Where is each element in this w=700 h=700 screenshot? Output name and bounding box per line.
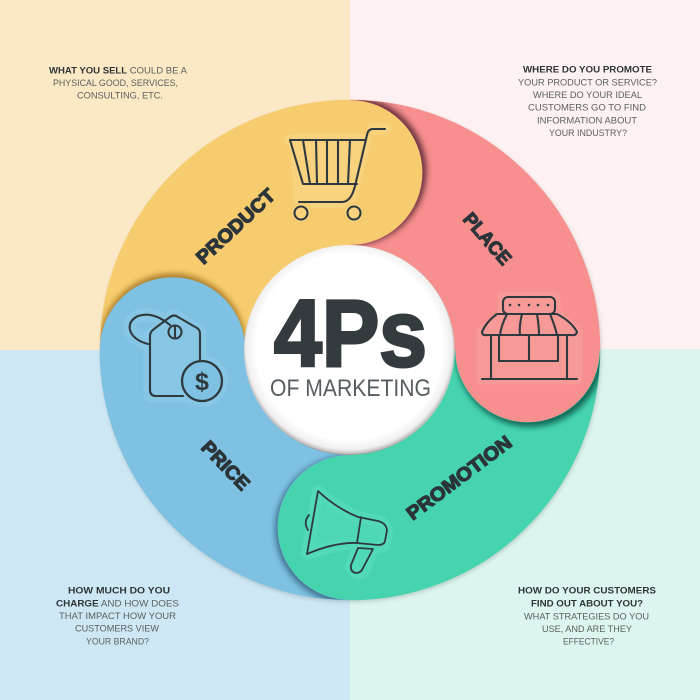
icon: megaphone [306, 491, 387, 574]
label: price: PRICE [197, 437, 253, 495]
center circle with title [244, 245, 454, 455]
text block: product description: PHYSICAL GOOD, SERVICES, [53, 78, 178, 89]
title: 4Ps: 4Ps [274, 281, 427, 387]
icon: storefront [482, 297, 577, 379]
background: price quadrant [0, 350, 350, 700]
text block: place description: CUSTOMERS GO TO FIND [528, 102, 646, 114]
text block: promotion description: HOW DO YOUR CUSTOMERS [518, 586, 657, 596]
text block: promotion description: USE, AND ARE THEY [542, 624, 633, 635]
text block: promotion description [518, 586, 657, 648]
text block: place description [518, 64, 657, 139]
text block: product description [49, 66, 188, 102]
text block: product description: WHAT YOU SELL COULD BE A [49, 66, 188, 76]
text block: promotion description: FIND OUT ABOUT YOU? [531, 598, 643, 610]
label: place: PLACE [458, 209, 515, 270]
text block: place description: WHERE DO YOUR IDEAL [533, 90, 643, 101]
text block: product description: CONSULTING, ETC. [77, 90, 163, 102]
label: product: PRODUCT [193, 185, 280, 269]
text block: promotion description: EFFECTIVE? [563, 636, 614, 648]
subtitle: of marketing: OF MARKETING [270, 375, 431, 402]
background: place quadrant [350, 0, 700, 349]
text block: place description: YOUR INDUSTRY? [549, 128, 627, 139]
wheel soft shadow [101, 102, 601, 602]
icon: shopping cart [290, 129, 385, 223]
panel: price segment [100, 277, 350, 600]
label: promotion: PROMOTION [403, 432, 516, 525]
text block: price description: YOUR BRAND? [86, 636, 149, 648]
text block: price description: HOW MUCH DO YOU [68, 586, 170, 596]
text block: place description: INFORMATION ABOUT [537, 116, 637, 126]
text block: promotion description: WHAT STRATEGIES DO YOU [524, 612, 649, 622]
panel: place segment [350, 100, 600, 422]
text block: price description [56, 586, 179, 648]
background: promotion quadrant [350, 349, 700, 700]
text block: price description: THAT IMPACT HOW YOUR [59, 611, 176, 622]
icon: price tag [130, 315, 228, 407]
background: product quadrant [0, 0, 350, 350]
text block: price description: CUSTOMERS VIEW [75, 624, 160, 634]
text block: place description: WHERE DO YOU PROMOTE [523, 64, 653, 76]
panel: product segment [100, 100, 422, 350]
panel: promotion segment [278, 350, 600, 600]
text block: place description: YOUR PRODUCT OR SERVICE? [518, 78, 657, 88]
icon: price tag: $ [195, 368, 209, 396]
text block: price description: CHARGE AND HOW DOES [56, 598, 179, 610]
